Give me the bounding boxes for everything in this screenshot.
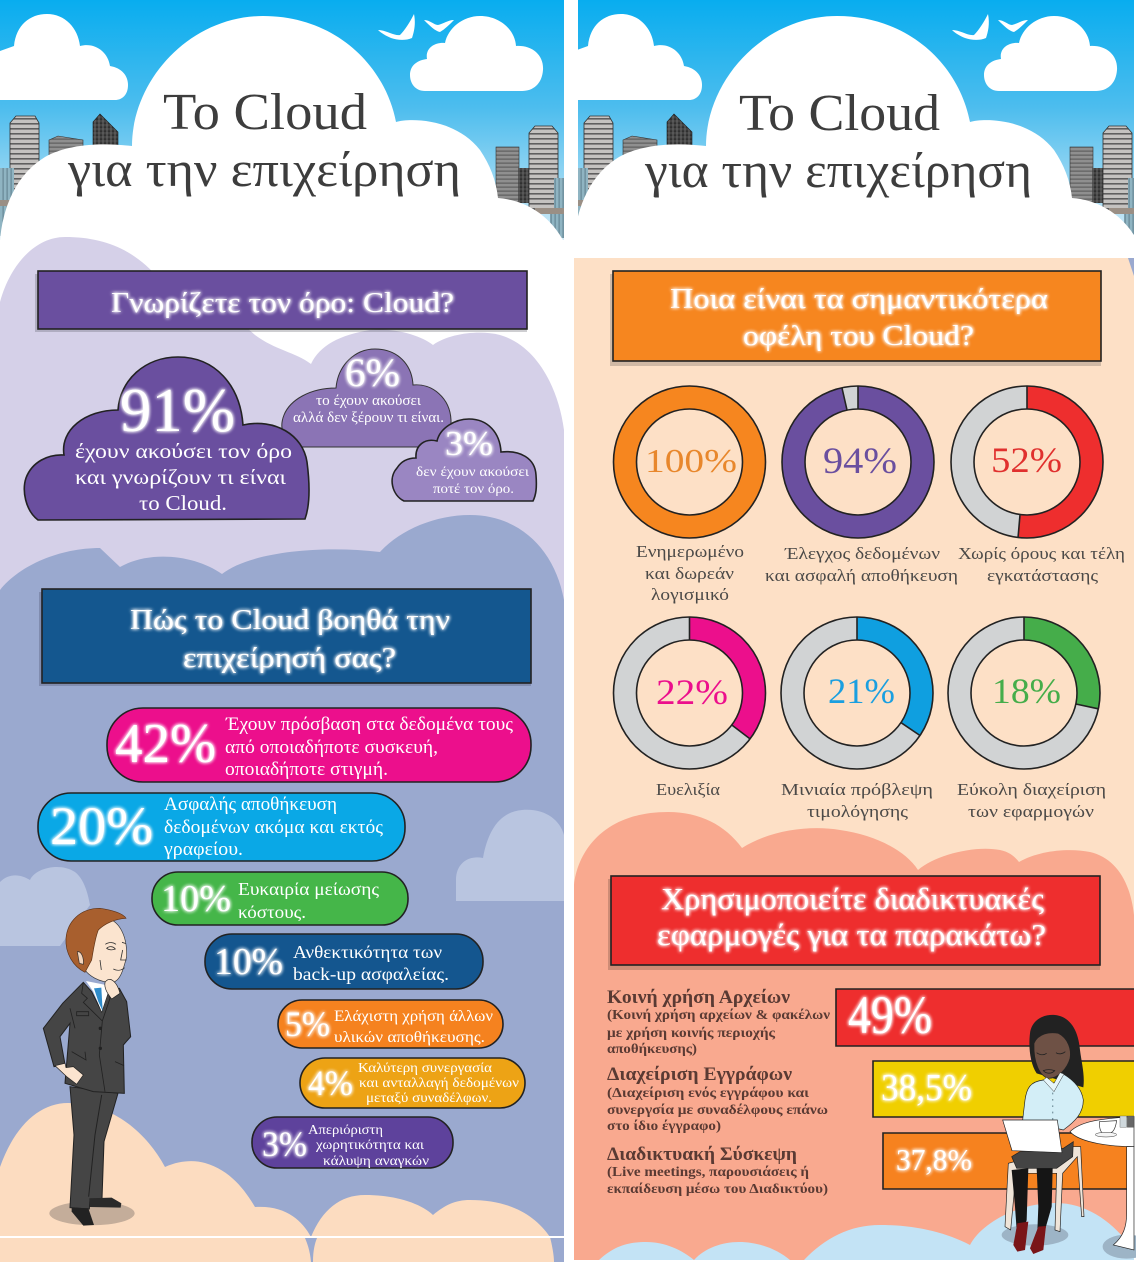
donut: 52%: 52%	[991, 440, 1062, 480]
blue corner	[1128, 258, 1134, 276]
heading: Πώς το Cloud βοηθά: επιχείρησή σας?	[183, 642, 396, 674]
light cloud left	[0, 867, 90, 946]
donut: 100%: 100%	[645, 443, 737, 480]
pill: 10% savings: κόστους.	[238, 902, 306, 922]
heading: Χρησιμοποιείτε διαδικτυακές	[608, 876, 1100, 970]
heading: Ποια είναι τα σημαντικότερα: Ποια είναι τα σημαντικότερα	[670, 284, 1048, 315]
cloud callout: 6%	[282, 349, 451, 447]
cloud callout: 91%: το Cloud.	[139, 491, 227, 515]
donut: 21%	[781, 617, 933, 769]
text block: document management: συνεργσία με συναδέλφους επάνω	[607, 1102, 828, 1117]
pill: 5%: 5%	[285, 1004, 330, 1044]
pill: 3%: χωρητικότητα και	[315, 1138, 424, 1153]
peach cloud at bottom	[0, 1103, 554, 1262]
donut label: Εύκολη διαχείριση: των εφαρμογών	[968, 802, 1094, 821]
pill: 10% backup: 10%	[214, 941, 283, 983]
divider line near bottom	[0, 1236, 564, 1238]
pill: 42%	[107, 708, 531, 782]
bar: file sharing 49%: 49%	[848, 985, 932, 1045]
bar: documents 38,5%: 38,5%	[881, 1067, 972, 1109]
cloud callout: 6%: 6%	[345, 350, 400, 395]
cloud callout: 6%: το έχουν ακούσει	[316, 393, 421, 409]
donut: 22%	[614, 617, 766, 769]
pill: 10% backup: Ανθεκτικότητα των	[293, 942, 442, 962]
donut label: Μινιαία πρόβλεψη: τιμολόγησης	[807, 802, 908, 821]
sky and city header right	[578, 0, 1134, 235]
heading: Χρησιμοποιείτε διαδικτυακές: εφαρμογές για τα παρακάτω?	[657, 917, 1046, 952]
title left: Το Cloud	[163, 84, 367, 141]
pill: 10% backup	[205, 934, 483, 989]
donut: 21%: 21%	[828, 671, 895, 711]
donut label: Έλεγχος δεδομένων	[765, 544, 958, 585]
bar: conferencing 37,8%	[883, 1133, 1134, 1189]
text block: document management: στο ίδιο έγγραφο)	[607, 1118, 721, 1133]
heading: Γνωρίζετε τον όρο: Γνωρίζετε τον όρο: Cloud?	[111, 287, 454, 319]
lavender cloud background	[0, 237, 564, 610]
donut: 100%	[614, 386, 766, 538]
panel: right page background	[574, 0, 1136, 1260]
donut label: Χωρίς όρους	[958, 544, 1125, 585]
donut: 22%: 22%	[656, 672, 728, 712]
heading: Γνωρίζετε τον όρο	[35, 271, 527, 332]
donut label: Μινιαία πρόβλεψη: Μινιαία πρόβλεψη	[781, 780, 933, 799]
pill: 20%	[38, 793, 405, 861]
pill: 10% savings: 10%	[161, 878, 231, 920]
donut label: Ενημερωμένο: λογισμικό	[651, 585, 729, 604]
pill: 4%: Καλύτερη συνεργασία	[358, 1061, 493, 1076]
cloud callout: 91%: έχουν ακούσει τον όρο	[75, 439, 292, 463]
pill: 20%: δεδομένων ακόμα και εκτός	[164, 817, 383, 838]
cloud callout: 91%	[24, 357, 309, 520]
donut: 94%: 94%	[823, 441, 897, 482]
sky and city header left	[0, 0, 564, 262]
cloud callout: 91%: 91%	[120, 377, 235, 445]
bar: conferencing 37,8%: 37,8%	[896, 1142, 972, 1177]
text block: online meeting: (Live meetings, παρουσιάσεις ή	[607, 1164, 809, 1179]
pill: 42%: 42%	[115, 713, 216, 775]
pill: 5%: υλικών αποθήκευσης.	[334, 1029, 485, 1046]
text block: file sharing: αποθήκευσης)	[607, 1041, 697, 1056]
text block: document management	[607, 1065, 828, 1133]
text block: online meeting: εκπαίδευση μέσω του Διαδικτύου)	[607, 1181, 828, 1196]
text block: file sharing: (Κοινή χρήση αρχείων & φακέλων	[607, 1007, 830, 1022]
pill: 20%: 20%	[50, 796, 153, 856]
pill: 42%: Έχουν πρόσβαση στα δεδομένα τους	[225, 714, 513, 735]
donut: 18%	[948, 617, 1100, 769]
pill: 4%	[300, 1058, 525, 1108]
donut: 52%	[951, 386, 1103, 538]
cloud callout: 3%	[392, 419, 536, 501]
donut label: Ενημερωμένο: Ενημερωμένο	[636, 542, 744, 561]
heading: Ποια είναι τα σημαντικότερα: οφέλη του Cloud?	[743, 321, 974, 352]
pill: 42%: από οποιαδήποτε συσκευή,	[225, 737, 438, 758]
heading: Πώς το Cloud βοηθά: Πώς το Cloud βοηθά την	[130, 604, 450, 636]
heading: Χρησιμοποιείτε διαδικτυακές: Χρησιμοποιείτε διαδικτυακές	[661, 881, 1044, 916]
cloud callout: 3%: δεν έχουν ακούσει	[416, 465, 529, 480]
pale blue cloud at bottom	[599, 1203, 1134, 1260]
pill: 5%	[278, 1000, 503, 1048]
donut label: Μινιαία πρόβλεψη	[781, 780, 933, 821]
donut label: Χωρίς όρους: εγκατάστασης	[987, 566, 1098, 585]
panel: left page background	[0, 0, 564, 1262]
text block: file sharing	[607, 988, 830, 1056]
pill: 4%: μεταξύ συναδέλφων.	[366, 1091, 492, 1106]
heading: Πώς το Cloud βοηθά	[39, 589, 531, 686]
pill: 3%: 3%	[262, 1124, 307, 1164]
heading: Ποια είναι τα σημαντικότερα	[610, 271, 1101, 366]
salmon cloud	[574, 812, 1134, 1260]
pill: 42%: οποιαδήποτε στιγμή.	[225, 759, 388, 780]
donut label: Έλεγχος δεδομένων: Έλεγχος δεδομένων	[784, 544, 940, 563]
text block: file sharing: με χρήση κοινής περιοχής	[607, 1025, 775, 1040]
pill: 4%: και ανταλλαγή δεδομένων	[359, 1076, 519, 1091]
text block: document management: (Διαχείριση ενός εγγράφου και	[607, 1085, 810, 1100]
cloud callout: 91%: και γνωρίζουν τι είναι	[75, 465, 286, 489]
cloud callout: 3%: 3%	[445, 424, 493, 463]
text block: online meeting: Διαδικτυακή Σύσκεψη	[607, 1145, 797, 1165]
donut label: Ευελιξία: Ευελιξία	[656, 780, 720, 799]
donut: 18%: 18%	[992, 671, 1061, 711]
peach background	[574, 258, 1134, 1260]
pill: 3%	[252, 1117, 453, 1169]
pill: 3%: Απεριόριστη	[308, 1123, 383, 1138]
cloud callout: 3%: ποτέ τον όρο.	[433, 482, 514, 497]
light cloud right	[456, 810, 564, 901]
pill: 20%: Ασφαλής αποθήκευση	[164, 794, 337, 815]
title left: για την επιχείρηση	[67, 141, 461, 197]
cloud callout: 6%: αλλά δεν ξέρουν τι είναι.	[293, 410, 444, 426]
donut label: Εύκολη διαχείριση: Εύκολη διαχείριση	[957, 780, 1106, 799]
blue cloud background	[0, 515, 564, 1262]
text block: online meeting	[607, 1145, 828, 1196]
pill: 5%: Ελάχιστη χρήση άλλων	[334, 1008, 493, 1025]
donut label: Χωρίς όρους: Χωρίς όρους και τέλη	[958, 544, 1125, 563]
bar: documents 38,5%	[873, 1061, 1134, 1117]
pill: 10% backup: back-up ασφαλείας.	[293, 964, 449, 984]
pill: 20%: γραφείου.	[163, 839, 243, 860]
pill: 10% savings	[152, 872, 408, 925]
text block: file sharing: Κοινή χρήση Αρχείων	[607, 988, 791, 1008]
illustration: businessman	[43, 908, 135, 1226]
donut label: Ενημερωμένο: και δωρεάν	[645, 564, 734, 583]
pill: 10% savings: Ευκαιρία μείωσης	[238, 879, 379, 899]
title left	[67, 84, 461, 197]
donut label: Έλεγχος δεδομένων: και ασφαλή αποθήκευση	[765, 566, 958, 585]
illustration: woman with laptop at table	[1002, 1015, 1136, 1259]
donut label: Εύκολη διαχείριση	[957, 780, 1106, 821]
bar: file sharing 49%	[836, 985, 1134, 1046]
pill: 4%: 4%	[308, 1063, 353, 1103]
donut: 94%	[781, 385, 935, 539]
text block: document management: Διαχείριση Εγγράφων	[607, 1065, 793, 1085]
donut label: Ενημερωμένο	[636, 542, 744, 604]
title right: Το Cloud	[739, 85, 940, 142]
pill: 3%: κάλυψη αναγκών	[323, 1154, 429, 1169]
title right	[644, 85, 1032, 198]
title right: για την επιχείρηση	[644, 142, 1032, 198]
